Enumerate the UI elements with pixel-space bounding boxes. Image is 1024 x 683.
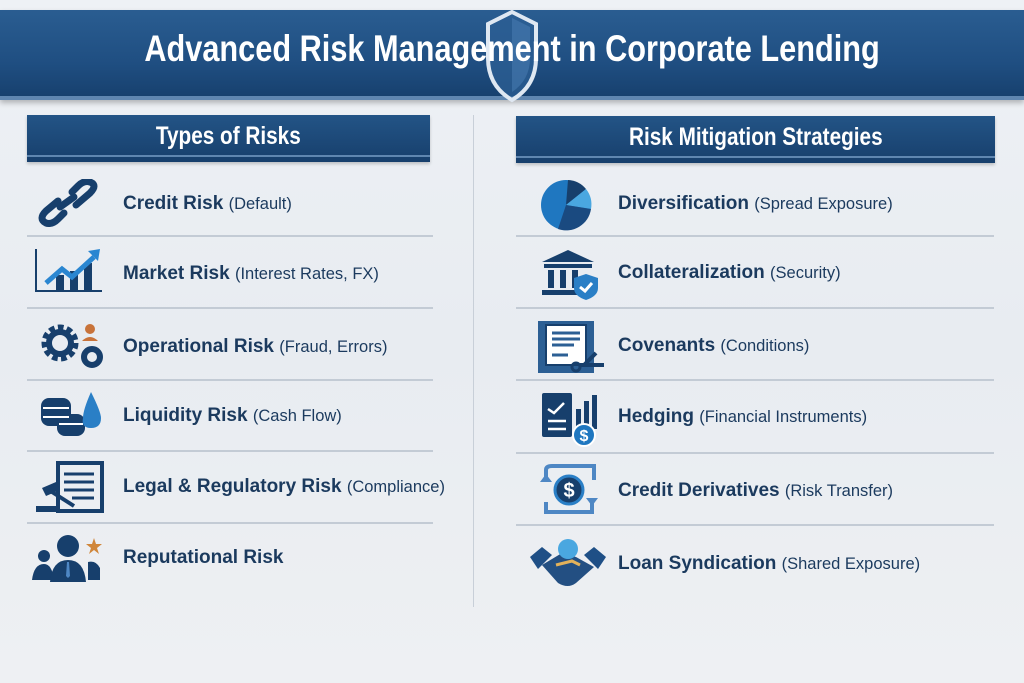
header band <box>0 10 1024 100</box>
icon: market chart <box>35 249 102 292</box>
icon: legal <box>36 461 104 513</box>
title: Advanced Risk Management in Corporate Lending <box>144 28 880 69</box>
row: credit risk: Credit Risk (Default) <box>123 193 292 214</box>
heading: types of risks <box>27 115 430 162</box>
panel: types of risks <box>26 115 445 582</box>
row: collateralization: Collateralization (Security) <box>618 262 841 283</box>
icon: bank shield <box>542 250 598 300</box>
row: operational risk: Operational Risk (Fraud, Errors) <box>123 336 387 357</box>
panel: risk mitigation strategies <box>514 116 996 586</box>
row: hedging: Hedging (Financial Instruments) <box>618 406 867 427</box>
icon: people star <box>32 535 102 582</box>
vertical divider <box>473 115 474 607</box>
icon: hedging <box>542 393 597 447</box>
icon: handshake <box>530 539 606 586</box>
row: loan syndication: Loan Syndication (Shared Exposure) <box>618 553 920 574</box>
icon: gears <box>42 324 103 368</box>
row: diversification: Diversification (Spread Exposure) <box>618 193 893 214</box>
icon: credit derivatives <box>540 464 598 514</box>
heading: risk mitigation strategies <box>516 116 995 163</box>
row: market risk: Market Risk (Interest Rates, FX) <box>123 263 379 284</box>
icon: coins and drop <box>41 392 101 436</box>
row: credit derivatives: Credit Derivatives (Risk Transfer) <box>618 480 893 501</box>
row: liquidity risk: Liquidity Risk (Cash Flow) <box>123 405 342 426</box>
heading: risk mitigation strategies: Risk Mitigation Strategies <box>629 123 882 151</box>
icon: covenant document <box>538 321 604 373</box>
icon: pie chart <box>541 180 592 230</box>
icon: chain <box>38 179 98 227</box>
icon: hedging: $ <box>580 428 589 445</box>
icon: shield <box>486 10 538 102</box>
heading: types of risks: Types of Risks <box>156 122 301 150</box>
row: covenants: Covenants (Conditions) <box>618 335 809 356</box>
row: legal & regulatory risk: Legal & Regulatory Risk (Compliance) <box>123 476 445 497</box>
row: reputational risk: Reputational Risk <box>123 547 283 568</box>
icon: credit derivatives: $ <box>563 480 575 502</box>
